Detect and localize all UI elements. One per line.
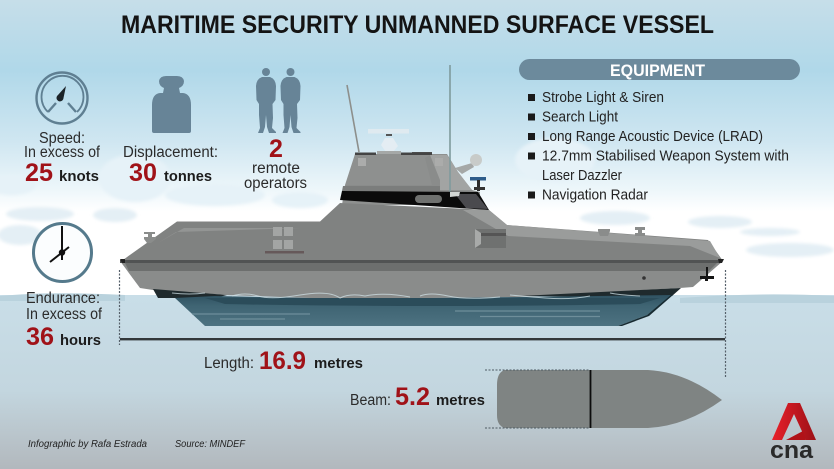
icon: two operators	[256, 68, 300, 133]
endurance stat: hours	[60, 332, 101, 349]
speed stat: knots	[59, 168, 99, 185]
antenna mast	[449, 65, 451, 192]
operators stat	[244, 135, 307, 192]
upper superstructure	[342, 154, 480, 205]
operators stat: remote	[252, 160, 300, 177]
weapon system	[470, 177, 486, 191]
side vent	[475, 229, 506, 248]
equipment list: Laser Dazzler	[542, 168, 622, 184]
length label: Length:	[204, 355, 254, 372]
speed stat: Speed:	[39, 130, 85, 147]
deck hatch panels	[265, 227, 304, 254]
credits: Infographic by Rafa Estrada	[28, 439, 147, 450]
beam label	[350, 383, 485, 411]
operators stat: 2	[269, 135, 283, 163]
length dimension	[120, 270, 726, 377]
rudder	[700, 267, 714, 281]
black window band	[340, 191, 489, 210]
length label: metres	[314, 355, 363, 372]
vessel top view	[485, 370, 722, 428]
mast antenna	[347, 85, 359, 152]
clouds	[0, 138, 834, 257]
icon: speed gauge	[36, 72, 88, 124]
equipment heading	[519, 59, 800, 80]
lower hull	[120, 261, 723, 298]
equipment list: 12.7mm Stabilised Weapon System with	[542, 148, 789, 164]
title: MARITIME SECURITY UNMANNED SURFACE VESSEL	[121, 11, 714, 39]
hull upper deck	[120, 203, 723, 262]
displacement stat: 30	[129, 159, 157, 187]
beam label: metres	[436, 392, 485, 409]
equipment list	[528, 90, 789, 204]
displacement stat: Displacement:	[123, 144, 218, 161]
credits: Source: MINDEF	[175, 439, 246, 450]
cna logo	[770, 403, 816, 464]
displacement stat: tonnes	[164, 168, 212, 185]
sea	[0, 295, 834, 469]
water ripples	[172, 293, 640, 299]
equipment list: Strobe Light & Siren	[542, 90, 664, 106]
vessel side view	[120, 65, 724, 326]
equipment list: Search Light	[542, 110, 618, 126]
endurance stat: In excess of	[26, 306, 103, 323]
beam label: Beam:	[350, 392, 391, 409]
length label: 16.9	[259, 347, 306, 375]
cna logo: cna	[770, 437, 814, 464]
background sky	[0, 0, 834, 235]
length label	[204, 347, 363, 375]
bollards	[144, 227, 645, 243]
gauge needle	[57, 86, 66, 101]
beam label: 5.2	[395, 383, 430, 411]
icon: endurance clock	[34, 224, 92, 282]
speed stat: 25	[25, 159, 53, 187]
navigation radar	[368, 129, 432, 155]
equipment heading: EQUIPMENT	[610, 61, 706, 80]
endurance stat: 36	[26, 323, 54, 351]
endurance stat: Endurance:	[26, 290, 100, 307]
endurance stat	[26, 290, 103, 351]
displacement stat	[123, 144, 218, 187]
equipment list: Navigation Radar	[542, 188, 648, 204]
equipment list: Long Range Acoustic Device (LRAD)	[542, 129, 763, 145]
equipment panel	[519, 59, 800, 204]
submerged hull	[175, 295, 672, 326]
operators stat: operators	[244, 175, 307, 192]
speed stat: In excess of	[24, 144, 101, 161]
search light	[455, 154, 482, 174]
credits	[28, 439, 246, 450]
icon: weight	[152, 76, 191, 133]
speed stat	[24, 130, 101, 187]
dark hull waterline	[153, 288, 681, 298]
